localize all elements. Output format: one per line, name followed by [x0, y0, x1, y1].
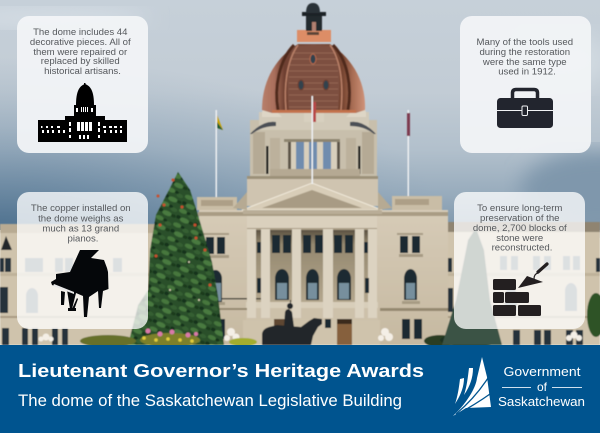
pale spruce behind right panel [442, 228, 502, 345]
street lamps [38, 328, 582, 342]
pediment and columns [206, 183, 422, 345]
left and right wings [0, 222, 600, 345]
central block [190, 196, 448, 345]
text: decorative pieces: historical artisans. [44, 66, 121, 77]
text: tools: during the restoration [479, 47, 570, 58]
text: tools: Many of the tools used [477, 37, 573, 48]
text: decorative pieces: replaced by skilled [41, 56, 120, 67]
logo: Government of Saskatchewan [453, 357, 585, 416]
text: stone blocks: preservation of the [480, 213, 560, 224]
text: copper weight: pianos. [68, 234, 98, 244]
logo: Government of Saskatchewan: of [537, 380, 548, 394]
drum below the dome [247, 96, 378, 206]
banner title: Lieutenant Governor’s Heritage Awards [18, 361, 424, 381]
equestrian statue [262, 300, 322, 345]
banner subtitle: The dome of the Saskatchewan Legislative Building [18, 392, 402, 410]
panel: decorative pieces [17, 16, 148, 153]
text: copper weight: much as 13 grand [42, 224, 119, 234]
text: decorative pieces: The dome includes 44 [33, 27, 128, 38]
icon: wheat sail [453, 357, 491, 416]
icon: bricks and trowel [493, 264, 547, 316]
panel: stone blocks [454, 192, 585, 329]
text: stone blocks: stone were [496, 233, 543, 244]
logo text: Government [504, 364, 581, 379]
icon: capitol building [38, 83, 127, 142]
flower beds and shrubs [80, 293, 600, 347]
logo: Government of Saskatchewan: Saskatchewan [498, 394, 585, 409]
banner [0, 345, 600, 433]
evergreen tree with flowers [128, 172, 224, 345]
flags and poles [216, 96, 410, 197]
icon: toolbox [497, 90, 553, 128]
text: stone blocks: dome, 2,700 blocks of [473, 223, 567, 234]
copper dome [262, 44, 365, 113]
text: stone blocks: To ensure long-term [477, 203, 562, 214]
lantern on top of the dome [297, 3, 331, 42]
text: copper weight: the dome weighs as [38, 214, 124, 224]
text: stone blocks: reconstructed. [492, 242, 552, 254]
text: copper weight: The copper installed on [31, 203, 131, 214]
text: tools: used in 1912. [498, 66, 556, 78]
text: decorative pieces: them were repaired or [33, 47, 128, 58]
text: tools: were the same type [482, 57, 567, 68]
panel: tools [460, 16, 591, 153]
icon: grand piano [51, 250, 108, 317]
panel: copper weight [17, 192, 148, 329]
text: decorative pieces: decorative pieces. All of [30, 37, 131, 48]
